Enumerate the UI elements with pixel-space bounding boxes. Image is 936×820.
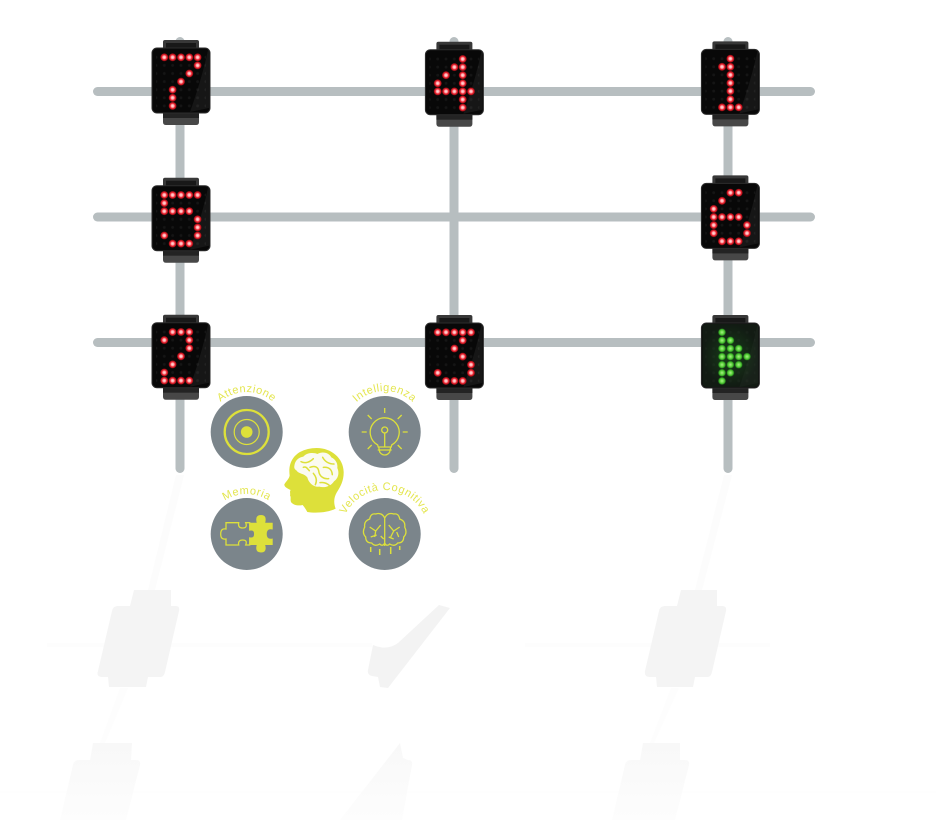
icon: cognitive speed brain with label bbox=[338, 482, 428, 570]
icon: head with brain bbox=[284, 448, 344, 513]
light: number 2 bbox=[152, 315, 210, 400]
light: number 6 bbox=[701, 175, 759, 260]
icon: intelligence light bulb with label bbox=[348, 383, 421, 468]
light: number 7 bbox=[152, 40, 210, 125]
icon: intelligence light bulb with label: Intelligenza bbox=[352, 383, 415, 402]
light: number 5 bbox=[152, 178, 210, 263]
grid poles bbox=[93, 37, 815, 473]
light: green arrow bbox=[701, 315, 759, 400]
icon: cognitive speed brain with label: Velocità Cognitiva bbox=[338, 482, 428, 514]
icon: attention target with label: Attenzione bbox=[218, 384, 275, 402]
icon: memory puzzle with label bbox=[210, 488, 283, 570]
icon: memory puzzle with label: Memoria bbox=[222, 488, 270, 500]
light: number 1 bbox=[701, 41, 759, 126]
reflection: faded lights and poles bbox=[0, 475, 936, 820]
icon: attention target with label bbox=[210, 384, 283, 468]
light: number 3 bbox=[425, 315, 483, 400]
light: number 4 bbox=[425, 42, 483, 127]
